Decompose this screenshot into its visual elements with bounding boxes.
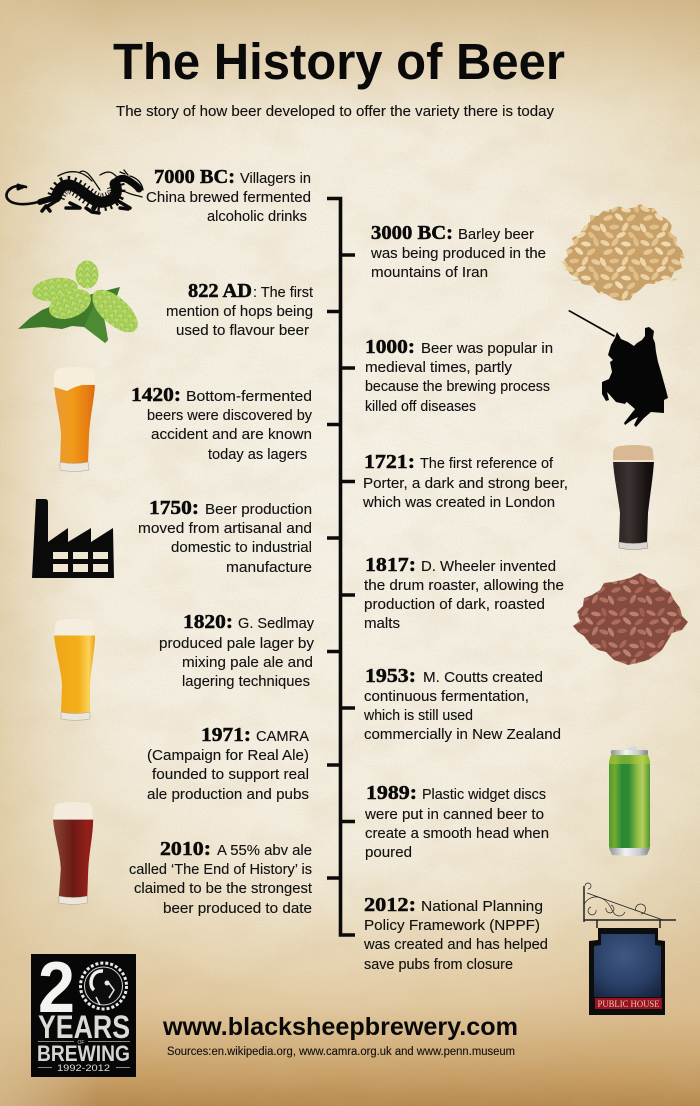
year: 1000: 1000:: [365, 336, 415, 358]
entry: 2012: Policy Framework (NPPF): [364, 917, 540, 934]
sign bracket: [584, 883, 676, 928]
year: 7000 BC: 7000 BC:: [154, 166, 235, 188]
entry: 1420: [131, 384, 312, 463]
entry: 2012: [363, 894, 548, 973]
badge: 20 years of brewing: BREWING: [37, 1041, 130, 1066]
entry: 2012: National Planning: [421, 898, 543, 915]
entry: 1420: accident and are known: [151, 426, 312, 443]
entry: 2010: called ‘The End of History’ is: [129, 861, 312, 878]
entry: 7000 BC: Villagers in: [240, 170, 311, 187]
entry: 7000 BC: alcoholic drinks: [207, 208, 307, 225]
entry: 1989: poured: [365, 844, 412, 861]
entry: 1989: create a smooth head when: [365, 825, 549, 842]
icon: hops: [18, 260, 145, 343]
entry: 1420: beers were discovered by: [147, 407, 312, 424]
icon: roasted malt pile: [573, 573, 688, 665]
icon: red ale glass: [53, 802, 93, 904]
badge: 20 years of brewing: OF: [78, 1040, 84, 1046]
sources: Sources:en.wikipedia.org, www.camra.org.uk and www.penn.museum: [167, 1046, 515, 1058]
entry: 7000 BC: China brewed fermented: [146, 189, 311, 206]
year: 1820: 1820:: [183, 611, 233, 633]
entry: 3000 BC: mountains of Iran: [371, 264, 488, 281]
entry: 1817: D. Wheeler invented: [421, 558, 556, 575]
badge: 20 years of brewing: [31, 948, 136, 1077]
year: 1721: 1721:: [364, 451, 415, 473]
entry: 1953: [363, 665, 561, 743]
icon: stout glass: [613, 445, 654, 550]
entry: 1750: domestic to industrial: [171, 539, 312, 556]
entry: 1820: lagering techniques: [182, 673, 310, 690]
entry: 1000: [365, 336, 553, 415]
entry: 1750: [138, 497, 312, 576]
icon: amber beer glass: [54, 367, 95, 472]
timeline spine with ticks: [327, 198, 355, 935]
entry: 1750: moved from artisanal and: [138, 520, 312, 537]
year: 1420: 1420:: [131, 384, 181, 406]
icon: green beer can: [609, 746, 650, 856]
entry: 3000 BC: [370, 222, 546, 281]
icon: lager glass: [54, 619, 95, 720]
entry: 822 AD: : The first: [253, 284, 314, 301]
year: 3000 BC: 3000 BC:: [371, 222, 453, 244]
entry: 2012: was created and has helped: [363, 936, 548, 953]
entry: 1971: founded to support real: [152, 766, 309, 783]
subtitle: The story of how beer developed to offer the variety there is today: [116, 103, 555, 120]
entry: 1971: ale production and pubs: [147, 786, 309, 803]
entry: 1000: medieval times, partly: [365, 359, 512, 376]
icon: factory: [32, 499, 114, 578]
entry: 1971: [147, 724, 309, 803]
entry: 1817: [364, 554, 564, 632]
badge: 20 years of brewing: 2: [38, 948, 75, 1028]
entry: 1820: produced pale lager by: [159, 635, 315, 652]
icon: pub sign: [584, 883, 676, 1015]
icon: dragon: [6, 170, 143, 213]
entry: 1000: Beer was popular in: [421, 340, 553, 357]
entry: 1989: were put in canned beer to: [364, 806, 544, 823]
icon: barley pile: [560, 204, 685, 301]
entry: 1820: mixing pale ale and: [182, 654, 313, 671]
entry: 822 AD: mention of hops being: [166, 303, 313, 320]
entry: 3000 BC: Barley beer: [458, 226, 534, 243]
entry: 1000: killed off diseases: [365, 398, 476, 415]
entry: 1817: production of dark, roasted: [364, 596, 545, 613]
title: The History of Beer: [113, 33, 565, 90]
entry: 1817: malts: [364, 615, 400, 632]
entry: 1820: [159, 611, 315, 690]
entry: 2010: claimed to be the strongest: [134, 880, 313, 897]
entry: 1953: commercially in New Zealand: [364, 726, 561, 743]
entry: 1953: which is still used: [363, 707, 473, 724]
badge: 20 years of brewing: 1992-2012: [57, 1063, 110, 1073]
entry: 1971: (Campaign for Real Ale): [147, 747, 309, 764]
year: 1817: 1817:: [365, 554, 416, 576]
entry: 1750: manufacture: [226, 559, 312, 576]
badge: 20 years of brewing: YEARS: [38, 1009, 130, 1045]
entry: 7000 BC: [146, 166, 311, 225]
sign label: PUBLIC HOUSE: [598, 1000, 660, 1010]
entry: 1721: which was created in London: [362, 494, 555, 511]
entry: 3000 BC: was being produced in the: [370, 245, 546, 262]
entry: 1989: [364, 782, 549, 861]
entry: 1721: [362, 451, 568, 511]
entry: 1420: today as lagers: [208, 446, 307, 463]
entry: 2010: beer produced to date: [163, 900, 312, 917]
entry: 822 AD: used to flavour beer: [176, 322, 309, 339]
entry: 1750: Beer production: [205, 501, 312, 518]
entry: 2010: A 55% abv ale: [217, 842, 312, 859]
entry: 822 AD: [166, 280, 314, 339]
entry: 2010: [129, 838, 313, 917]
year: 1750: 1750:: [149, 497, 199, 519]
year: 822 AD: 822 AD: [188, 280, 252, 302]
year: 2010: 2010:: [160, 838, 211, 860]
entry: 1000: because the brewing process: [365, 378, 550, 395]
year: 1953: 1953:: [365, 665, 416, 687]
entry: 1820: G. Sedlmay: [238, 615, 314, 632]
entry: 1971: CAMRA: [256, 728, 309, 745]
entry: 1721: Porter, a dark and strong beer,: [363, 475, 568, 492]
entry: 1721: The first reference of: [420, 455, 554, 472]
entry: 1953: M. Coutts created: [423, 669, 543, 686]
entry: 1817: the drum roaster, allowing the: [364, 577, 564, 594]
entry: 1420: Bottom-fermented: [186, 388, 312, 405]
entry: 2012: save pubs from closure: [364, 956, 513, 973]
year: 1971: 1971:: [201, 724, 251, 746]
icon: knight on horseback: [568, 310, 668, 427]
entry: 1989: Plastic widget discs: [422, 786, 546, 803]
entry: 1953: continuous fermentation,: [364, 688, 529, 705]
website url: www.blacksheepbrewery.com: [162, 1013, 518, 1041]
year: 2012: 2012:: [364, 894, 416, 916]
year: 1989: 1989:: [366, 782, 417, 804]
